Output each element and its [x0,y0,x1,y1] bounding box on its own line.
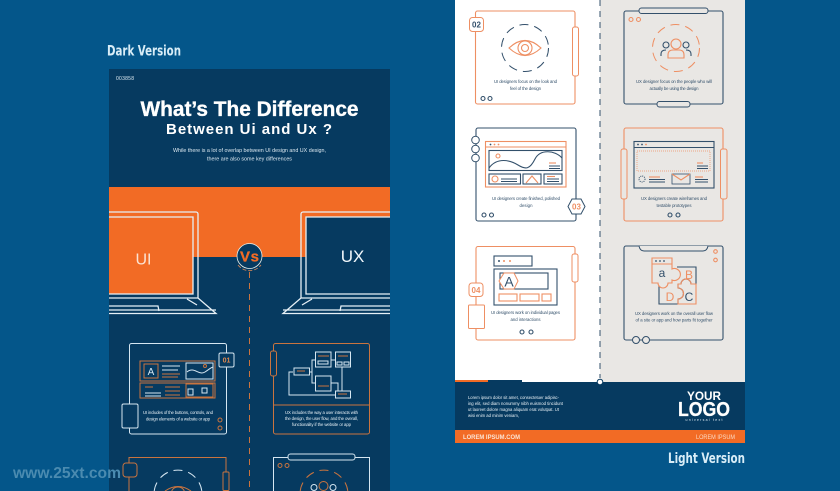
side tab [468,305,484,328]
card 02: eye: feel of the design [510,86,542,91]
laptop: UI [109,212,216,314]
text: UI designers create finished, polished [492,196,561,201]
card: UI elements [122,344,234,434]
text: UX designer focus on the people who will [636,79,712,84]
top tab [288,454,355,460]
card 02: eye [470,11,578,104]
icon: people [300,470,348,491]
footer text: ing elit, sed diam nonummy nibh euismod tincidunt [468,401,564,406]
card: UX flow: the design, the user flow, and the overall, [285,416,358,421]
right tab [572,254,578,282]
card: puzzle [624,246,723,344]
dots [481,96,492,100]
dots [714,250,717,262]
center dashed line [248,272,250,491]
rings [472,136,479,162]
card: UX flow: functionality if the website or app [292,422,352,427]
left tab [621,149,627,199]
icon: ui layout: A [148,367,155,378]
icon: page layout: A [504,274,514,290]
label: UI: UI [136,252,152,268]
watermark: www.25xt.com [12,465,121,482]
logo: YOUR [687,389,721,403]
text: UX designers work on the overall user flow [635,311,714,316]
footer [455,379,745,443]
dots [629,18,640,22]
badge 04: 04 [472,286,481,295]
orange footer bar: LOREM IPSUM [696,434,735,441]
title: Between Ui and Ux ? [166,121,332,138]
subtitle: there are also some key differences [207,156,292,162]
heading: light version: Light Version [668,451,745,467]
card: UX people (cropped) [274,454,370,491]
badge 03: 03 [572,202,581,212]
icon: puzzle: B [685,268,693,282]
badge 01: 01 [223,358,230,364]
orange footer bar [455,430,745,443]
panel: dark version poster [109,69,390,491]
icon: puzzle: D [666,290,675,304]
dots [218,418,222,430]
side tab [122,404,138,428]
text: UX designers create wireframes and [641,196,708,201]
logo: universal text [686,418,723,422]
badge [123,463,137,477]
card 03: polished design: design [520,203,533,208]
heading: dark version: Dark Version [107,44,181,60]
top tab [639,8,708,14]
vs badge: Vs [240,248,259,266]
title [140,98,358,138]
top tab [639,246,708,251]
card: people [624,8,723,107]
card: people: actually be using the design [650,86,699,91]
card: UI elements: design elements of a website or app [146,416,211,422]
orange band [109,187,390,257]
title: What’s The Difference [140,98,358,121]
side tab [223,472,229,490]
card 03: polished design [472,128,585,221]
icon: puzzle: C [685,290,694,304]
right tab [720,149,727,199]
text: UI designers focus on the look and [494,79,558,84]
logo [678,389,730,422]
side tab [270,351,276,376]
card: UI eye (cropped) [123,458,229,491]
icon: puzzle: a [659,266,666,280]
orange footer bar: LOREM IPSUM.COM [463,434,520,441]
dots [668,213,680,217]
bottom tab [657,102,690,107]
dots [520,330,533,334]
card: wireframes: testable prototypes [656,203,692,208]
card: puzzle: of a site or app and how parts fit together [636,318,713,322]
laptop: UX [283,212,390,314]
icon: puzzle [652,258,696,304]
side tab [572,27,578,76]
text: UI includes of the buttons, controls, and [143,410,214,415]
icon: eye [502,24,548,72]
subtitle [173,148,326,162]
badge 02: 02 [472,20,481,30]
icon: wireframe window [634,142,714,188]
text: UX includes the way a user interacts with [285,410,359,415]
card 04: individual pages [468,246,578,340]
card: wireframes [621,128,727,221]
dots [278,464,289,468]
bottom rings [632,336,650,344]
icon: user flow diagram [289,352,350,398]
label: UX: UX [341,247,364,266]
subtitle: While there is a lot of overlap between UI design and UX design, [173,148,326,154]
panel: light version poster [455,0,745,467]
icon: ui window [486,142,566,187]
card 04: individual pages: and interactions [510,317,540,322]
dots [482,213,494,217]
footer text: wisi enim ad minim veniam, [468,413,519,418]
logo: LOGO [678,399,730,421]
icon: people [652,24,700,72]
text: UI designers work on individual pages [491,310,560,315]
footer text: Lorem ipsum dolor sit amet, consectetuer adipisc- [468,395,559,400]
footer node [597,379,603,385]
poster code: 003858 [116,76,134,82]
icon: eye [154,470,202,491]
footer text [468,395,564,418]
center dashed line [599,0,601,378]
footer text: ut laoreet dolore magna aliquam erat volutpat. Ut [468,407,560,412]
vs badge [237,244,262,271]
card: UX flow [270,344,370,434]
